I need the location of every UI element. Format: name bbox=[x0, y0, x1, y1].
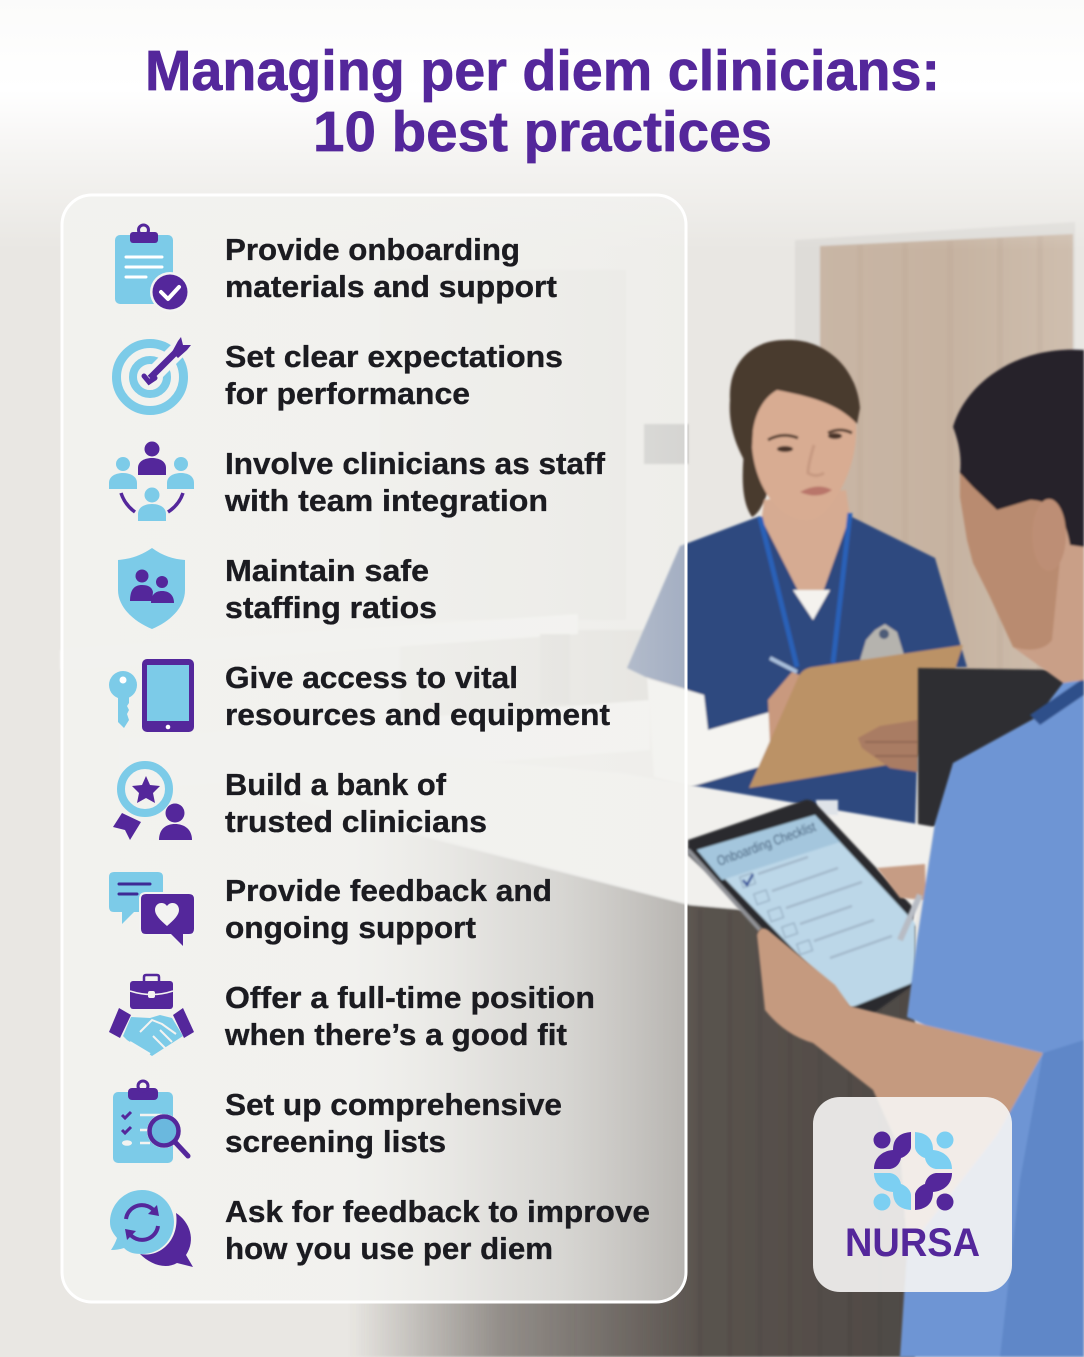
text bbox=[225, 660, 610, 732]
stethoscope bbox=[900, 895, 920, 940]
title: Managing per diem clinicians: bbox=[145, 39, 940, 103]
lanyard bbox=[760, 513, 850, 667]
text: Involve clinicians as staff bbox=[225, 446, 606, 481]
text: Ask for feedback to improve bbox=[225, 1194, 650, 1229]
item 4: staffing ratios bbox=[118, 548, 437, 629]
supporting hand bbox=[858, 720, 918, 772]
text: Offer a full-time position bbox=[225, 980, 595, 1015]
tablet with onboarding checklist bbox=[688, 800, 915, 1023]
door with frame bbox=[795, 222, 1075, 680]
ponytail bbox=[743, 440, 772, 517]
item 10: ask for feedback bbox=[110, 1190, 650, 1267]
neck bbox=[760, 490, 852, 622]
clipboard bbox=[749, 645, 963, 788]
glass panel behind the list bbox=[62, 195, 686, 1302]
text: ongoing support bbox=[225, 910, 476, 945]
text: Build a bank of bbox=[225, 767, 447, 802]
icon: speech bubbles with heart bbox=[109, 872, 196, 949]
title: 10 best practices bbox=[313, 100, 772, 164]
icon: chat bubbles with sync arrows bbox=[110, 1190, 193, 1267]
item 6: trusted bank bbox=[113, 765, 487, 840]
nurse holding clipboard bbox=[627, 340, 967, 830]
text bbox=[225, 1087, 562, 1159]
icon: key and tablet bbox=[109, 659, 194, 732]
icon: checklist and magnifier bbox=[113, 1081, 188, 1163]
collar bbox=[1030, 678, 1084, 725]
text: Set clear expectations bbox=[225, 339, 563, 374]
item 8: full-time position bbox=[109, 975, 595, 1056]
text bbox=[225, 553, 437, 625]
text bbox=[224, 446, 606, 518]
hair bbox=[953, 350, 1084, 547]
text bbox=[225, 873, 552, 945]
scrub top bbox=[627, 516, 967, 830]
text: staffing ratios bbox=[225, 590, 437, 625]
text bbox=[225, 339, 563, 411]
item 5: resources bbox=[109, 659, 610, 732]
checklist text on tablet: Onboarding Checklist bbox=[715, 818, 818, 869]
face bbox=[960, 473, 1060, 650]
item 1: onboarding bbox=[115, 225, 557, 312]
lower hand and arm bbox=[757, 928, 1043, 1250]
logo mark bbox=[874, 1132, 954, 1210]
far hand bbox=[877, 864, 926, 900]
checklist rows bbox=[740, 857, 892, 958]
text: when there’s a good fit bbox=[224, 1017, 567, 1052]
pen bbox=[770, 658, 797, 672]
text: resources and equipment bbox=[225, 697, 610, 732]
dark folder bbox=[918, 668, 1065, 830]
writing hand bbox=[768, 672, 812, 750]
facial features bbox=[768, 430, 852, 440]
icon: briefcase and handshake bbox=[109, 975, 194, 1056]
hair bbox=[730, 340, 860, 470]
text bbox=[225, 1194, 650, 1266]
text: how you use per diem bbox=[225, 1231, 553, 1266]
icon: team circle bbox=[109, 442, 194, 521]
logo card bbox=[813, 1097, 1012, 1292]
light blue scrubs bbox=[900, 680, 1084, 1357]
neck bbox=[990, 480, 1084, 683]
icon: target with arrow bbox=[116, 337, 191, 410]
icon: shield with people bbox=[118, 548, 185, 629]
text: screening lists bbox=[225, 1124, 446, 1159]
text: materials and support bbox=[225, 269, 557, 304]
item 7: feedback and support bbox=[109, 872, 552, 949]
text: for performance bbox=[225, 376, 470, 411]
text: with team integration bbox=[224, 483, 548, 518]
text: Set up comprehensive bbox=[225, 1087, 562, 1122]
logo wordmark: NURSA bbox=[845, 1221, 980, 1265]
undershirt bbox=[793, 590, 830, 620]
second nurse seen from behind bbox=[757, 350, 1084, 1357]
faint shelves behind panel bbox=[60, 270, 688, 790]
text: Maintain safe bbox=[225, 553, 429, 588]
text bbox=[224, 980, 595, 1052]
icon: award and person bbox=[113, 765, 192, 840]
white undersleeve bbox=[647, 678, 776, 787]
face bbox=[752, 385, 856, 520]
sleeve shade bbox=[1000, 1040, 1084, 1357]
icon: clipboard with check bbox=[115, 225, 190, 312]
ear bbox=[1032, 499, 1066, 571]
text bbox=[225, 767, 487, 839]
text: trusted clinicians bbox=[225, 804, 487, 839]
top white fade bbox=[0, 0, 1084, 250]
text: Provide onboarding bbox=[225, 232, 520, 267]
item 3: team integration bbox=[109, 442, 606, 521]
title bbox=[145, 39, 940, 164]
text: Give access to vital bbox=[225, 660, 518, 695]
text: Provide feedback and bbox=[225, 873, 552, 908]
counter bbox=[300, 745, 935, 1357]
clip bbox=[860, 624, 905, 660]
text bbox=[225, 232, 557, 304]
item 9: screening lists bbox=[113, 1081, 562, 1163]
item 2: expectations bbox=[116, 337, 563, 411]
